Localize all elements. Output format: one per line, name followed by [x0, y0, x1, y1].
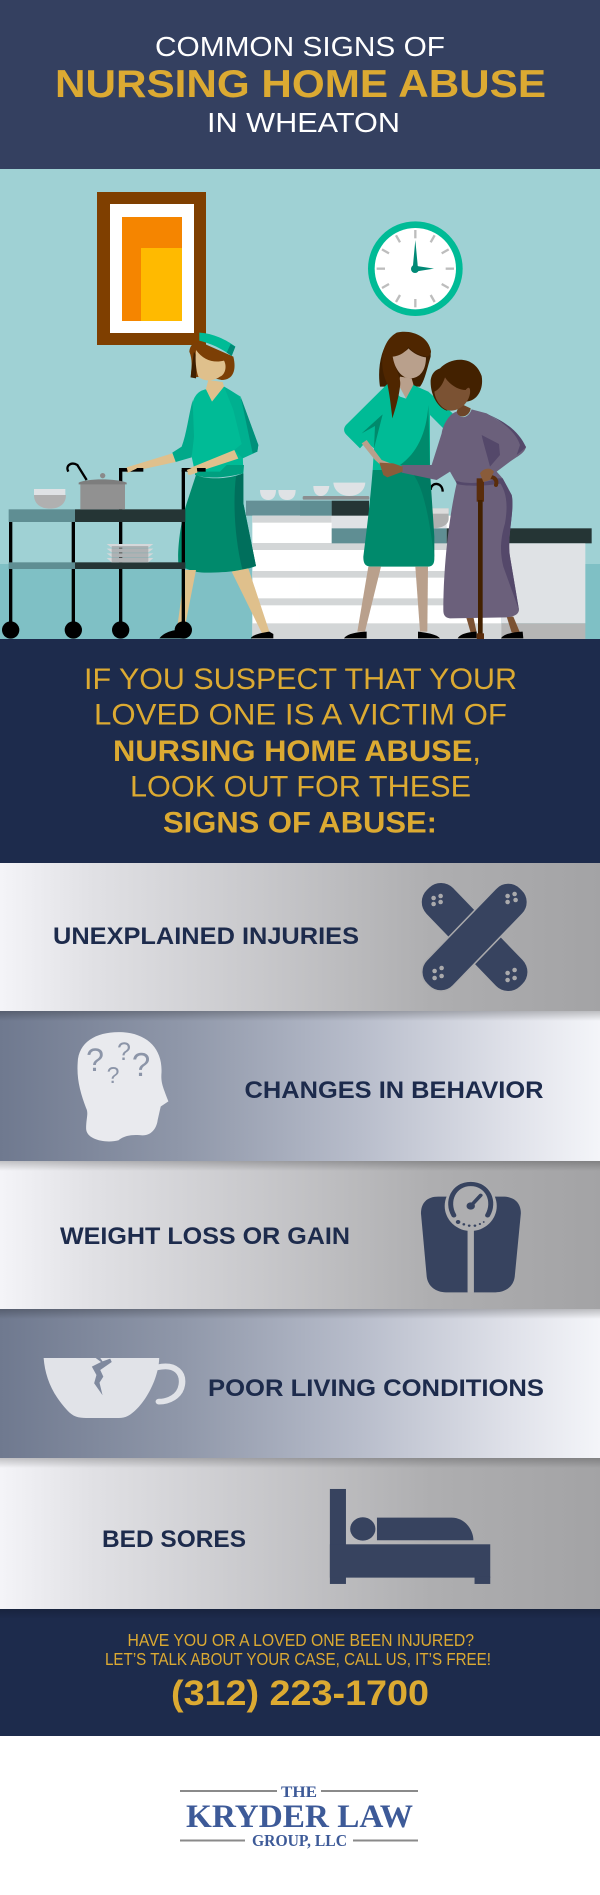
panel: poor living conditions [0, 1309, 600, 1458]
panel: intro message [0, 639, 600, 863]
logo text: kryder law: KRYDER LAW [186, 1799, 413, 1835]
icon: cracked cup [44, 1358, 182, 1418]
title line: in wheaton: IN WHEATON [207, 107, 400, 138]
icon: head with question marks: ? [86, 1042, 104, 1078]
title line: nursing home abuse: NURSING HOME ABUSE [55, 63, 546, 106]
icon: crossed bandages [415, 876, 534, 998]
label: poor living conditions: POOR LIVING CONDITIONS [208, 1375, 544, 1402]
phone number: (312) 223-1700 [171, 1674, 429, 1713]
icon: head with question marks: ? [107, 1062, 119, 1088]
serving trolley [2, 464, 206, 639]
label: bed sores: BED SORES [102, 1526, 246, 1553]
icon: bathroom scale [421, 1181, 521, 1292]
intro line 3: NURSING HOME ABUSE , [113, 735, 481, 768]
panel: unexplained injuries [0, 863, 600, 1011]
intro line 4: LOOK OUT FOR THESE [130, 770, 471, 804]
intro line 5: SIGNS OF ABUSE: [163, 807, 437, 840]
wall clock [368, 221, 463, 316]
panel: weight loss or gain [0, 1161, 600, 1309]
icon: head with question marks: ? [132, 1046, 150, 1083]
panel: bed sores [0, 1458, 600, 1609]
intro line 2: LOVED ONE IS A VICTIM OF [94, 698, 507, 732]
logo text: group llc: GROUP, LLC [252, 1831, 347, 1850]
figure: caregiver [344, 332, 453, 638]
panel: illustration scene [0, 169, 600, 640]
panel: logo footer [0, 1736, 600, 1895]
cooking pot [67, 464, 127, 509]
title line: common signs of: COMMON SIGNS OF [155, 31, 445, 62]
figure: elderly woman with cane [379, 360, 526, 639]
picture frame [97, 192, 206, 345]
kitchen counters [246, 483, 592, 639]
panel: changes in behavior [0, 1011, 600, 1161]
mixing bowl [34, 489, 66, 509]
icon: head with question marks [77, 1032, 168, 1141]
intro line 1: IF YOU SUSPECT THAT YOUR [84, 663, 517, 696]
panel: page header [0, 0, 600, 169]
text: call invitation: LET’S TALK ABOUT YOUR CASE, CALL US, IT’S FREE! [105, 1649, 491, 1669]
icon: person in bed [330, 1489, 490, 1584]
stacked plates [107, 544, 153, 562]
logo text: the: THE [281, 1784, 317, 1801]
figure: nurse with trolley [127, 333, 273, 638]
panel: call to action [0, 1609, 600, 1736]
label: weight loss or gain: WEIGHT LOSS OR GAIN [60, 1223, 350, 1250]
label: changes in behavior: CHANGES IN BEHAVIOR [244, 1077, 544, 1104]
icon: head with question marks: ? [117, 1038, 131, 1066]
label: unexplained injuries: UNEXPLAINED INJURIES [53, 923, 359, 950]
text: injured question: HAVE YOU OR A LOVED ONE BEEN INJURED? [128, 1630, 474, 1650]
